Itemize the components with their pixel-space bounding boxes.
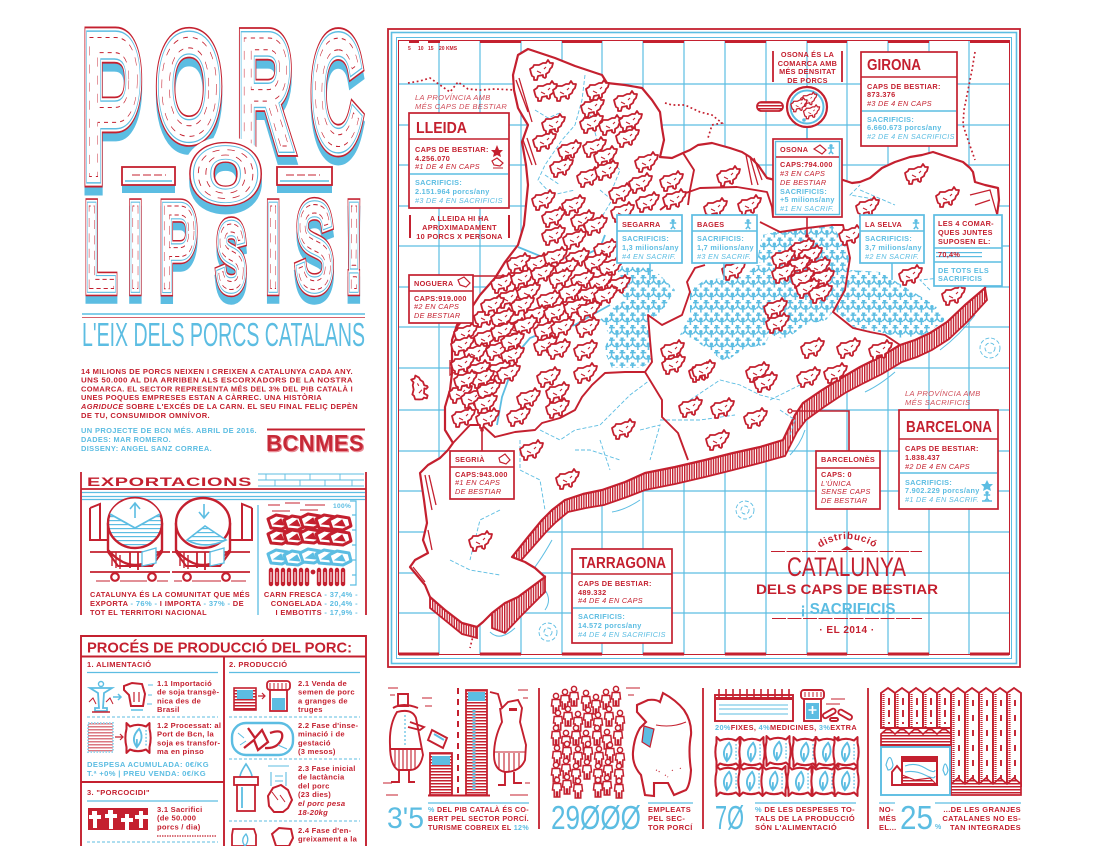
callout: La Selva (860, 215, 924, 280)
map: sacrifice density areas (600, 225, 945, 368)
callout: Noguera: DE BESTIAR (414, 311, 461, 320)
title row: -O- bars and ring: O (194, 135, 257, 213)
callout: Bages: 1,7 milions/any (697, 243, 754, 252)
title row: PORC: O (158, 10, 220, 166)
map: delta strip (430, 577, 545, 638)
bottom panel: food costs (715, 689, 859, 836)
callout: Osona density: COMARCA AMB (778, 59, 837, 68)
icon: pills (822, 699, 853, 721)
title row: PORC: R (238, 6, 292, 180)
callout: Barcelona: LA PROVÍNCIA AMB (905, 389, 981, 398)
callout: Barcelona: CAPS DE BESTIAR: (905, 444, 979, 453)
intro text (80, 367, 358, 420)
callout: Segarra: #4 EN SACRIF. (622, 252, 676, 261)
chart: meat shares: 100% (333, 503, 351, 510)
callout: Girona: 873.376 (867, 90, 895, 99)
text: exports caption: TOT EL TERRITORI NACIONAL (90, 608, 207, 617)
callout: Barcelones: BARCELONÈS (821, 455, 875, 464)
process text: step 1: de soja transgè- (157, 688, 219, 697)
stat text: PIB (428, 803, 529, 832)
process text: step 2: greixament a la (298, 835, 358, 844)
callout: Bages: SACRIFICIS: (697, 234, 744, 243)
illustration: big pig (626, 688, 691, 796)
callout: La Selva: #2 EN SACRIF. (865, 252, 919, 261)
callout: Lleida: CAPS DE BESTIAR: (415, 145, 489, 154)
process text: step 1: Port de Bcn, la (157, 730, 214, 739)
text: exports caption: EXPORTA - 76% - I IMPORTA - 37% - DE (90, 599, 244, 608)
icon: insemination (232, 723, 293, 755)
title row: -O- bars and ring: O (194, 135, 257, 213)
icon: arrow and sack (115, 723, 151, 753)
note: persons per pig: APROXIMADAMENT (422, 223, 497, 232)
title row: PORC: P (82, 0, 142, 220)
callout: Lleida (409, 93, 509, 208)
scale bar labels: 10 (418, 46, 424, 52)
process text: step 2: 2.1 Venda de (298, 679, 347, 688)
callout: Noguera (409, 274, 505, 323)
process text: step 1: Brasil (157, 705, 180, 714)
title row: PORC: O (158, 10, 220, 166)
stat text: food: TALS DE LA PRODUCCIÓ (755, 814, 855, 823)
subtitle: L'EIX DELS PORCS CATALANS (82, 316, 365, 353)
callout: Osona (773, 139, 842, 238)
callout: Osona density (773, 50, 842, 85)
callout: Barcelona: BARCELONA (906, 419, 992, 436)
title row: PORC: C (312, 8, 361, 179)
line: el 2014: · EL 2014 · (819, 625, 875, 636)
chart: meat shares (268, 501, 356, 585)
scale bar labels: 5 (408, 46, 411, 52)
callout: Girona: GIRONA (867, 57, 921, 74)
icon: euro block and jar (234, 681, 290, 711)
callout: Barcelones: SENSE CAPS (821, 487, 871, 496)
illustration: feed sacks (715, 736, 859, 796)
callout: Lleida: #1 DE 4 EN CAPS (415, 162, 480, 171)
process text: step 1: soja es transfor- (157, 738, 221, 747)
title row: -O- bars and ring: O (194, 135, 257, 213)
title row: PORC: O (158, 10, 220, 166)
icon: statue (89, 682, 113, 712)
section headers (87, 660, 287, 797)
text: meat caption (264, 590, 358, 617)
process text: step 1: 1.2 Processat: al (157, 721, 221, 730)
text: exports caption: CATALUNYA ÉS LA COMUNITAT QUE MÉS (90, 590, 250, 599)
logo: BCNMES: BCNMES (266, 430, 364, 456)
process text: step 3 (157, 805, 202, 831)
illustration: man with sunglasses (490, 690, 530, 795)
text: meat caption: I EMBOTITS - 17,9% - (276, 608, 358, 617)
icon: export barrel (90, 498, 170, 581)
intro text: DE TU, CONSUMIDOR OMNÍVOR. (81, 411, 210, 420)
text: meat caption: CONGELADA - 20,4% - (271, 599, 358, 608)
callout: Segria: SEGRIÀ (455, 455, 485, 464)
title row: PORC (82, 0, 361, 228)
title row: PORC: C (312, 8, 361, 179)
map: pigs (livestock heads) (406, 60, 965, 551)
callout: Tarragona: 489.332 (578, 588, 606, 597)
illustration: calendar (715, 689, 793, 721)
stat: 29000: 29ØØØ (551, 799, 641, 836)
process text: step 2: 18-20kg (298, 808, 328, 817)
illustration: farm (881, 747, 950, 795)
stat: 25: % (935, 824, 942, 831)
brick pattern (258, 474, 364, 486)
callout: Bages: #3 EN SACRIF. (697, 252, 751, 261)
callout: Tarragona: 14.572 porcs/any (578, 621, 642, 630)
note: persons per pig (410, 214, 509, 241)
map: Catalunya coast strip (512, 288, 987, 565)
callout: Barcelona: #2 DE 4 EN CAPS (905, 462, 970, 471)
stat text: food: SÓN L'ALIMENTACIÓ (755, 823, 837, 832)
callout: La Selva: 3,7 milions/any (865, 243, 922, 252)
map title (756, 532, 938, 636)
process text: step 2: semen de porc (298, 688, 355, 697)
callout: Tarragona (572, 549, 672, 643)
callout: Girona: #2 DE 4 EN SACRIFICIS (867, 132, 955, 141)
stat text: integrated: ...DE LES GRANJES (943, 805, 1021, 814)
section headers: 1. ALIMENTACIÓ (87, 660, 151, 669)
intro text: UNES POQUES EMPRESES ESTAN A CÀRREC. UNA HISTÒRIA (81, 393, 322, 402)
title row: PORC: O (158, 10, 220, 166)
callout: Segarra: SEGARRA (622, 220, 661, 229)
callout: Girona: 6.660.673 porcs/any (867, 123, 942, 132)
line: sacrificis: ¡ SACRIFICIS (800, 601, 896, 618)
process text: step 1: 1.1 Importació (157, 679, 212, 688)
callout: Segarra (617, 215, 682, 280)
callout: Noguera: NOGUERA (414, 279, 454, 288)
callout: Lleida: #3 DE 4 EN SACRIFICIS (415, 196, 503, 205)
callout: les 4 comarques: 70,4% (938, 250, 960, 259)
stat text: food: % DE LES DESPESES TO- (755, 805, 855, 814)
title row: PORC: O (158, 18, 220, 174)
callout: Segria: DE BESTIAR (455, 487, 502, 496)
cost note: DESPESA ACUMULADA: 0€/KG (87, 760, 209, 769)
callout: La Selva: SACRIFICIS: (865, 234, 912, 243)
word: Catalunya: CATALUNYA (787, 552, 906, 582)
title row: PORC: C (312, 8, 361, 179)
callout: Barcelona: 1.838.437 (905, 453, 940, 462)
process text: step 2: gestació (298, 738, 331, 747)
callout: Lleida: LA PROVÍNCIA AMB (415, 93, 491, 102)
process text: step 3: (de 50.000 (157, 814, 196, 823)
callout: Lleida: 4.256.070 (415, 154, 450, 163)
callout: Lleida: MÉS CAPS DE BESTIAR (415, 102, 507, 111)
process text: step 2: a granges de (298, 696, 348, 705)
callout: Osona: CAPS:794.000 (780, 160, 833, 169)
note: persons per pig: 10 PORCS X PERSONA (416, 232, 503, 241)
callout: Osona density: MÉS DENSITAT (779, 67, 836, 76)
icon: bottle and piglet (234, 764, 292, 812)
callout: Segarra: 1,3 milions/any (622, 243, 679, 252)
illustration: crowd (552, 686, 624, 798)
callout: Tarragona: #4 DE 4 EN CAPS (578, 596, 643, 605)
title row: LIPsIS!: LIPsIS! (85, 187, 362, 322)
stat text: employees: EMPLEATS (648, 805, 691, 814)
illustration: man with hat (383, 688, 447, 795)
callout: Osona density: DE PORCS (787, 76, 828, 85)
title row: -O- bars and ring: O (194, 143, 257, 221)
section headers: 2. PRODUCCIÓ (229, 660, 287, 669)
title row: PORC: R (238, 6, 292, 180)
map: rivers (450, 75, 940, 575)
callout: Barcelona: #1 DE 4 EN SACRIF. (905, 495, 979, 504)
callout: Segria: #1 EN CAPS (455, 478, 500, 487)
title row: -O- bars and ring (122, 135, 332, 221)
process text: step 1: nica des de (157, 696, 201, 705)
stat: 3'5: 3'5 (387, 802, 424, 835)
stat: 70: 7Ø (715, 799, 744, 836)
title row: PORC: O (158, 10, 220, 166)
process text: step 1 (157, 679, 221, 756)
callout: Lleida: SACRIFICIS: (415, 178, 462, 187)
callout: La Selva: LA SELVA (865, 220, 903, 229)
process text: step 2: del porc (298, 781, 330, 790)
callout: Barcelones: L'ÚNICA (821, 479, 851, 488)
callout: les 4 comarques: SUPOSEN EL: (938, 237, 991, 246)
title row: LIPsIS!: LIPsIS! (85, 180, 362, 314)
callout: Tarragona: TARRAGONA (579, 555, 666, 572)
process text: step 2: minació i de (298, 730, 345, 739)
callout: Tarragona: SACRIFICIS: (578, 612, 625, 621)
map: Catalunya land (410, 49, 999, 627)
section headers: 3. "PORCOCIDI" (87, 788, 150, 797)
callout: les 4 comarques: QUES JUNTES (938, 228, 993, 237)
logo: BCNMES: BCNMES (267, 431, 365, 457)
scale bar labels: 20 KMS (439, 46, 458, 52)
title row: -O- bars and ring: O (194, 135, 257, 213)
map: province boundaries (413, 78, 997, 582)
intro text: COMARCA. EL SECTOR REPRESENTA MÉS DEL 3% DEL PIB CATALÀ I (81, 384, 353, 393)
bottom panel: employees (551, 686, 693, 836)
callout: Bages (692, 215, 757, 280)
callout: Barcelones: CAPS: 0 (821, 470, 852, 479)
process text: step 2: el porc pesa (298, 799, 345, 808)
stat text: employees: PEL SEC- (648, 814, 685, 823)
callout: Osona: #3 EN CAPS (780, 169, 825, 178)
cost note (87, 760, 209, 778)
callout: Noguera: CAPS:919.000 (414, 294, 467, 303)
callout: Tarragona: #4 DE 4 EN SACRIFICIS (578, 630, 666, 639)
text: meat caption: CARN FRESCA - 37,4% - (264, 590, 358, 599)
process text: step 2: 2.2 Fase d'inse- (298, 721, 358, 730)
callout: Barcelona (899, 389, 998, 509)
callout: Osona: #1 EN SACRIF. (780, 204, 834, 213)
title row: PORC: R (238, 6, 292, 180)
callout: Lleida: 2.151.964 porcs/any (415, 187, 490, 196)
callout: les 4 comarques: LES 4 COMAR- (938, 219, 994, 228)
title row: LIPsIS!: LIPsIS! (85, 180, 362, 314)
stat text: integrated: TAN INTEGRADES (950, 823, 1021, 832)
scale bar labels: 15 (428, 46, 434, 52)
process text: step 2: truges (298, 705, 323, 714)
title row: PORC: R (238, 14, 292, 188)
stat text: PIB: TURISME COBREIX EL 12% (428, 823, 529, 832)
line: dels caps de bestiar: DELS CAPS DE BESTIAR (756, 582, 938, 597)
callout: Barcelones: DE BESTIAR (821, 496, 868, 505)
illustration: fence (881, 688, 1021, 795)
callout: Osona: +5 milions/any (780, 195, 835, 204)
stat label: nomes el (879, 803, 897, 832)
scale bar labels (408, 46, 458, 52)
map: sea whirls (539, 338, 1000, 641)
process text: step 3: 3.1 Sacrifici (157, 805, 202, 814)
title row: PORC: P (82, 0, 142, 220)
callout: les 4 comarques (934, 215, 1002, 286)
title row: LIPsIS!: LIPsIS! (85, 180, 362, 314)
callout: Osona: OSONA (780, 145, 809, 154)
callout: Girona: CAPS DE BESTIAR: (867, 82, 941, 91)
stat text: employees (648, 803, 693, 832)
icon: import barrel (172, 498, 252, 581)
callout: Osona: SACRIFICIS: (780, 187, 827, 196)
process text: step 2: (23 dies) (298, 790, 331, 799)
heading: exportacions: EXPORTACIONS (87, 477, 252, 489)
callout: Noguera: #2 EN CAPS (414, 302, 459, 311)
title row: PORC: P (82, 2, 142, 228)
title row: PORC: C (312, 16, 361, 187)
credits: DISSENY: ANGEL SANZ CORREA. (81, 444, 212, 453)
process text: step 2 (298, 679, 358, 844)
process text: step 1: ma en pinso (157, 747, 204, 756)
word: distribucio: distribució (818, 532, 877, 547)
stat: 25: 25 (900, 799, 933, 836)
callout: Barcelona: MÉS SACRIFICIS (905, 398, 970, 407)
stat text: PIB: BERT PEL SECTOR PORCÍ. (428, 814, 529, 823)
label: fixed costs: 20%FIXES, 4%MEDICINES, 3%EXTRA (715, 723, 857, 732)
process text: step 2: 2.4 Fase d'en- (298, 826, 352, 835)
credits: UN PROJECTE DE BCN MÉS. ABRIL DE 2016. (81, 426, 257, 435)
stat text: food (755, 803, 856, 832)
heading: proces: PROCÉS DE PRODUCCIÓ DEL PORC: (87, 638, 352, 656)
title row: PORC: R (238, 6, 292, 180)
map frame (388, 29, 1020, 667)
icon: pill bottle (801, 690, 824, 721)
intro text: 14 MILIONS DE PORCS NEIXEN I CREIXEN A CATALUNYA CADA ANY. (81, 367, 353, 376)
icon: sack and pig (232, 828, 293, 846)
callout: Barcelones (788, 409, 880, 509)
callout: Bages: BAGES (697, 220, 724, 229)
title row: -O- bars and ring: O (194, 135, 257, 213)
callout: Segarra: SACRIFICIS: (622, 234, 669, 243)
title row: -O- bars and ring: O (194, 135, 257, 213)
stat text: employees: TOR PORCÍ (648, 823, 693, 832)
callout: Osona density: OSONA ÉS LA (781, 50, 835, 59)
process text: step 2: de lactància (298, 773, 345, 782)
title row: LIPsIS!: LIPsIS! (85, 180, 362, 314)
callout: Lleida: LLEIDA (416, 120, 467, 137)
callout: Girona: SACRIFICIS: (867, 115, 914, 124)
icon: soy man (113, 683, 153, 710)
title row: PORC: C (312, 8, 361, 179)
credits: DADES: MAR ROMERO. (81, 435, 171, 444)
callout: Tarragona: CAPS DE BESTIAR: (578, 579, 652, 588)
stat label: nomes el: EL... (879, 823, 897, 832)
icon: soy dots (88, 723, 113, 752)
title: Porc-o-lipsis (82, 0, 362, 322)
callout: les 4 comarques: DE TOTS ELS (938, 266, 989, 275)
map: sea ripples (490, 315, 975, 636)
title row: LIPsIS!: LIPsIS! (85, 180, 362, 314)
intro text: AGRIDUCE SOBRE L'EXCÉS DE LA CARN. EL SEU FINAL FELIÇ DEPÈN (80, 402, 358, 411)
stat label: nomes el: NO- (879, 805, 894, 814)
stat text: integrated: CATALANES NO ES- (942, 814, 1021, 823)
panel: exportacions (81, 472, 366, 617)
text: exports caption (90, 590, 250, 617)
stat label: nomes el: MÉS (879, 814, 896, 823)
callout: Segria: CAPS:943.000 (455, 470, 508, 479)
process text: step 3: porcs / dia) (157, 822, 201, 831)
panel: proces de produccio (81, 636, 366, 846)
callout: Girona (861, 52, 957, 146)
process text: step 2: 2.3 Fase inicial (298, 764, 356, 773)
icon: magnifier (757, 87, 827, 139)
chart: euro bars (428, 688, 490, 796)
callout: Barcelona: SACRIFICIS: (905, 478, 952, 487)
title row: PORC: P (82, 0, 142, 220)
title row: PORC: P (82, 0, 142, 220)
icon: crosses (88, 808, 148, 830)
bottom panel: PIB (383, 688, 530, 835)
stat text: PIB: % DEL PIB CATALÀ ÉS CO- (428, 805, 529, 814)
note: persons per pig: A LLEIDA HI HA (430, 214, 490, 223)
bottom panel: integrated farms (879, 688, 1021, 836)
process text: step 2: (3 mesos) (298, 747, 336, 756)
stat text: integrated (935, 803, 1021, 832)
callout: Osona: DE BESTIAR (780, 178, 827, 187)
credits (81, 426, 257, 453)
intro text: UNS 50.000 AL DIA ARRIBEN ALS ESCORXADORS DE LA NOSTRA (81, 376, 353, 385)
callout: Barcelona: 7.902.229 porcs/any (905, 486, 980, 495)
borders with France and Aragon (408, 52, 975, 648)
callout: les 4 comarques: SACRIFICIS (938, 274, 982, 283)
title row: PORC: P (82, 0, 142, 220)
title row: PORC: R (238, 6, 292, 180)
cost note: T.ª +0% | PREU VENDA: 0€/KG (87, 769, 206, 778)
title row: PORC: C (312, 8, 361, 179)
callout: Segria (450, 428, 514, 499)
callout: Girona: #3 DE 4 EN CAPS (867, 99, 932, 108)
